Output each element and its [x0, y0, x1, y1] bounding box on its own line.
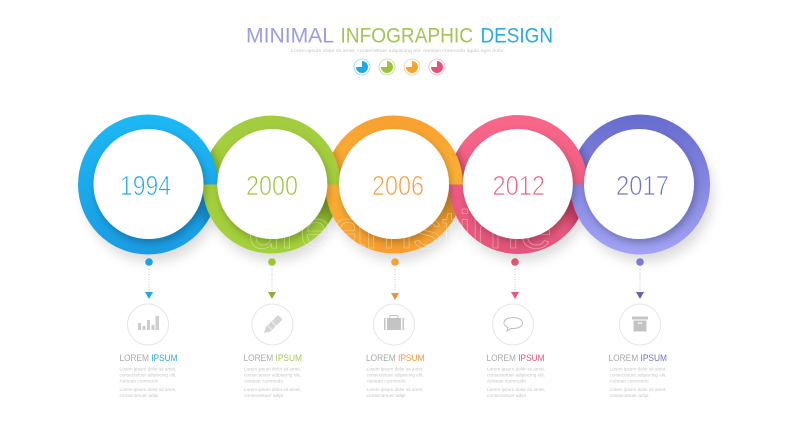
- text block: column 1: consectetuer adipiscing elit.: [120, 372, 176, 378]
- year disc: 2012: 2012: [492, 170, 545, 201]
- icon: speech bubble: [492, 304, 534, 345]
- text block: column 2: Lorem ipsum dolor sit amet,: [244, 366, 301, 372]
- text block: column 3: consectetuer adipiscing elit.: [366, 372, 424, 378]
- icon: green pie: [379, 59, 395, 75]
- text block: column 5: consectetuer adipiscing elit.: [610, 372, 666, 378]
- year disc: 2006: [339, 129, 449, 239]
- text block: column 4: [486, 353, 545, 398]
- text block: column 1: Aenean commodo: [120, 378, 159, 384]
- text block: column 5: consectetuer adipi: [610, 393, 648, 398]
- ring: purple: [570, 114, 710, 254]
- text block: column 1: LOREM IPSUM: [120, 353, 178, 363]
- icon: pink pie: [429, 59, 445, 75]
- text block: column 3: [366, 353, 424, 398]
- text block: column 3: Aenean commodo: [366, 378, 406, 384]
- text block: column 5: Aenean commodo: [610, 378, 649, 384]
- legend pie icons: [354, 59, 445, 75]
- text block: column 1: Lorem ipsum dolor sit amet,: [120, 387, 176, 392]
- year disc: 2000: [217, 129, 327, 239]
- year disc: 1994: [94, 129, 204, 239]
- text block: column 4: consectetuer adipiscing elit.: [487, 372, 545, 378]
- text block: column 4: consectetuer adipi: [487, 393, 526, 398]
- text block: column 3: Lorem ipsum dolor sit amet,: [366, 387, 424, 392]
- connector: pink: [511, 258, 519, 299]
- connector: blue: [145, 258, 153, 299]
- ring: orange: [326, 116, 466, 254]
- connector: orange: [391, 258, 399, 300]
- text block: column 2: Aenean commodo: [244, 378, 283, 384]
- text block: column 4: Lorem ipsum dolor sit amet,: [487, 387, 545, 392]
- icon: briefcase: [374, 304, 414, 345]
- text block: column 4: Aenean commodo: [487, 378, 526, 384]
- watermark: dreamstime: [248, 200, 552, 260]
- text block: column 5: LOREM IPSUM: [608, 353, 667, 363]
- connector: purple: [636, 258, 644, 299]
- text block: column 2: consectetuer adipiscing elit.: [244, 372, 301, 378]
- text block: column 3: LOREM IPSUM: [366, 353, 424, 363]
- ring: blue: [78, 114, 222, 254]
- text block: column 2: LOREM IPSUM: [244, 353, 302, 363]
- text block: column 5: Lorem ipsum dolor sit amet,: [610, 366, 666, 372]
- ring: pink: [448, 115, 590, 254]
- year disc: 2006: 2006: [372, 170, 424, 201]
- icon: archive box: [620, 304, 660, 345]
- icon: pencil: [252, 304, 293, 345]
- text block: column 5: Lorem ipsum dolor sit amet,: [610, 387, 666, 392]
- text block: column 4: LOREM IPSUM: [486, 353, 544, 363]
- text block: column 2: consectetuer adipi: [244, 393, 283, 398]
- year disc: 2012: [463, 129, 573, 239]
- title: MINIMAL: [246, 24, 334, 48]
- year disc: 2000: 2000: [246, 170, 298, 201]
- text block: column 4: Lorem ipsum dolor sit amet,: [487, 366, 545, 372]
- text block: column 5: [608, 353, 667, 398]
- icon: bar chart: [128, 304, 168, 345]
- text block: column 3: Lorem ipsum dolor sit amet,: [366, 366, 424, 372]
- connector: green: [268, 258, 276, 299]
- subtitle: Lorem ipsum dolor sit amet, consectetuer adipiscing elit. Aenean commodo ligula eget dolor.: [291, 48, 505, 53]
- title: INFOGRAPHIC: [340, 24, 473, 48]
- text block: column 2: [244, 353, 302, 398]
- year disc: 2017: 2017: [616, 170, 669, 201]
- title: [246, 24, 553, 48]
- ring: green: [203, 116, 343, 254]
- icon: orange pie: [404, 59, 420, 75]
- text block: column 3: consectetuer adipi: [366, 393, 406, 398]
- title: DESIGN: [480, 24, 553, 48]
- year disc: 1994: 1994: [120, 170, 171, 201]
- text block: column 2: Lorem ipsum dolor sit amet,: [244, 387, 301, 392]
- text block: column 1: consectetuer adipi: [120, 393, 158, 398]
- icon: blue pie: [354, 59, 370, 75]
- text block: column 1: [120, 353, 178, 398]
- year disc: 2017: [584, 129, 694, 239]
- text block: column 1: Lorem ipsum dolor sit amet,: [120, 366, 176, 372]
